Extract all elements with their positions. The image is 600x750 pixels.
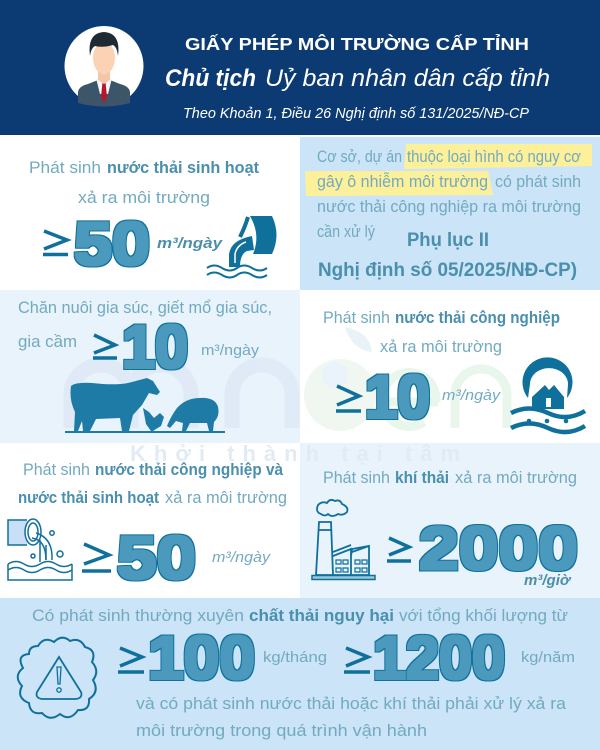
unit: kg/tháng xyxy=(263,649,327,666)
threshold: 50: 50 xyxy=(117,524,196,592)
panel content: livestock: Chăn nuôi gia súc, giết mổ gia súc, xyxy=(18,298,272,317)
icon: factory with smoke xyxy=(312,500,375,580)
title: GIẤY PHÉP MÔI TRƯỜNG CẤP TỈNH xyxy=(185,33,529,54)
panel content: industrial wastewater conditions: Nghị định số 05/2025/NĐ-CP) xyxy=(318,260,577,281)
panel content: hazardous waste: với tổng khối lượng từ xyxy=(399,606,568,625)
yellow highlight xyxy=(305,144,592,196)
unit: kg/năm xyxy=(521,649,575,666)
threshold: 10: 10 xyxy=(122,314,188,380)
panel content: hazardous waste: môi trường trong quá trình vận hành xyxy=(136,721,427,740)
panel content: hazardous waste xyxy=(18,606,575,740)
panel content: combined wastewater: xả ra môi trường xyxy=(165,488,287,507)
icon: drain pipe xyxy=(207,216,276,278)
panel content: combined wastewater: nước thải công nghiệp và xyxy=(95,460,283,479)
panel content: industrial wastewater: Phát sinh xyxy=(323,308,390,327)
panel: bottom band xyxy=(0,598,600,750)
panel content: industrial wastewater xyxy=(323,308,585,432)
panel content: domestic wastewater: Phát sinh xyxy=(29,158,101,177)
unit: m³/ngày xyxy=(157,235,223,252)
panel content: hazardous waste: chất thải nguy hại xyxy=(249,606,394,625)
header band xyxy=(0,0,600,135)
icon: warning cloud xyxy=(18,638,96,718)
panel: row three right xyxy=(300,443,600,598)
unit: m³/ngày xyxy=(442,387,502,404)
threshold: 50 xyxy=(43,210,150,278)
icon: outflow pipe into water xyxy=(8,519,72,580)
subtitle: Uỷ ban nhân dân cấp tỉnh xyxy=(265,65,550,92)
panel content: domestic wastewater xyxy=(29,158,276,278)
unit: m³/ngày xyxy=(212,549,272,566)
icon: flooded building xyxy=(511,357,585,432)
panel content: livestock: gia cầm xyxy=(18,332,77,351)
unit: m³/giờ xyxy=(524,572,572,589)
threshold: 100: 100 xyxy=(148,624,255,692)
threshold: 1200: 1200 xyxy=(373,624,505,692)
panel content: industrial wastewater conditions: nước thải công nghiệp ra môi trường xyxy=(317,197,581,216)
panel content: domestic wastewater: nước thải sinh hoạt xyxy=(107,158,259,177)
panel content: industrial wastewater: nước thải công nghiệp xyxy=(395,308,560,327)
panel content: industrial wastewater conditions: Cơ sở, dự án xyxy=(317,147,402,166)
panel content: emissions xyxy=(312,468,578,589)
panel content: industrial wastewater conditions: Phụ lục II xyxy=(407,230,489,251)
panel: row two left xyxy=(0,290,300,443)
panel content: domestic wastewater: xả ra môi trường xyxy=(78,188,210,207)
threshold: 50: 50 xyxy=(74,210,150,278)
threshold: 10 xyxy=(336,364,430,430)
panel content: industrial wastewater conditions xyxy=(305,144,592,281)
panel content: industrial wastewater conditions: gây ô nhiễm môi trường xyxy=(317,172,488,191)
panel content: combined wastewater: Phát sinh xyxy=(23,460,90,479)
unit: m³/ngày xyxy=(201,342,260,359)
panel content: emissions: xả ra môi trường xyxy=(455,468,577,487)
panel content: industrial wastewater: xả ra môi trường xyxy=(380,337,502,356)
panel content: combined wastewater xyxy=(8,460,287,592)
panel content: hazardous waste: Có phát sinh thường xuyên xyxy=(32,606,244,625)
threshold: 50 xyxy=(82,524,196,592)
panel content: industrial wastewater conditions: có phát sinh xyxy=(495,172,581,191)
threshold: 10 xyxy=(93,314,188,380)
legal reference: Theo Khoản 1, Điều 26 Nghị định số 131/2025/NĐ-CP xyxy=(183,106,529,122)
panel content: livestock xyxy=(18,298,272,433)
watermark logo: Khởi thành tại tâm xyxy=(130,441,460,466)
icon: businessman avatar xyxy=(64,26,144,106)
subtitle: Chủ tịch xyxy=(165,65,256,92)
panel: row one right xyxy=(300,137,600,290)
panel content: emissions: khí thải xyxy=(395,468,449,487)
panel content: combined wastewater: nước thải sinh hoạt xyxy=(18,488,159,507)
threshold: 2000: 2000 xyxy=(419,515,578,582)
watermark logo xyxy=(71,327,507,466)
threshold: 10: 10 xyxy=(365,364,430,430)
panel content: hazardous waste: và có phát sinh nước thải hoặc khí thải phải xử lý xả ra xyxy=(136,694,567,713)
icon: cow, chicken and sheep xyxy=(65,378,225,433)
threshold: 2000 xyxy=(387,515,578,582)
panel content: industrial wastewater conditions: cần xử lý xyxy=(317,222,375,241)
panel content: emissions: Phát sinh xyxy=(323,468,390,487)
